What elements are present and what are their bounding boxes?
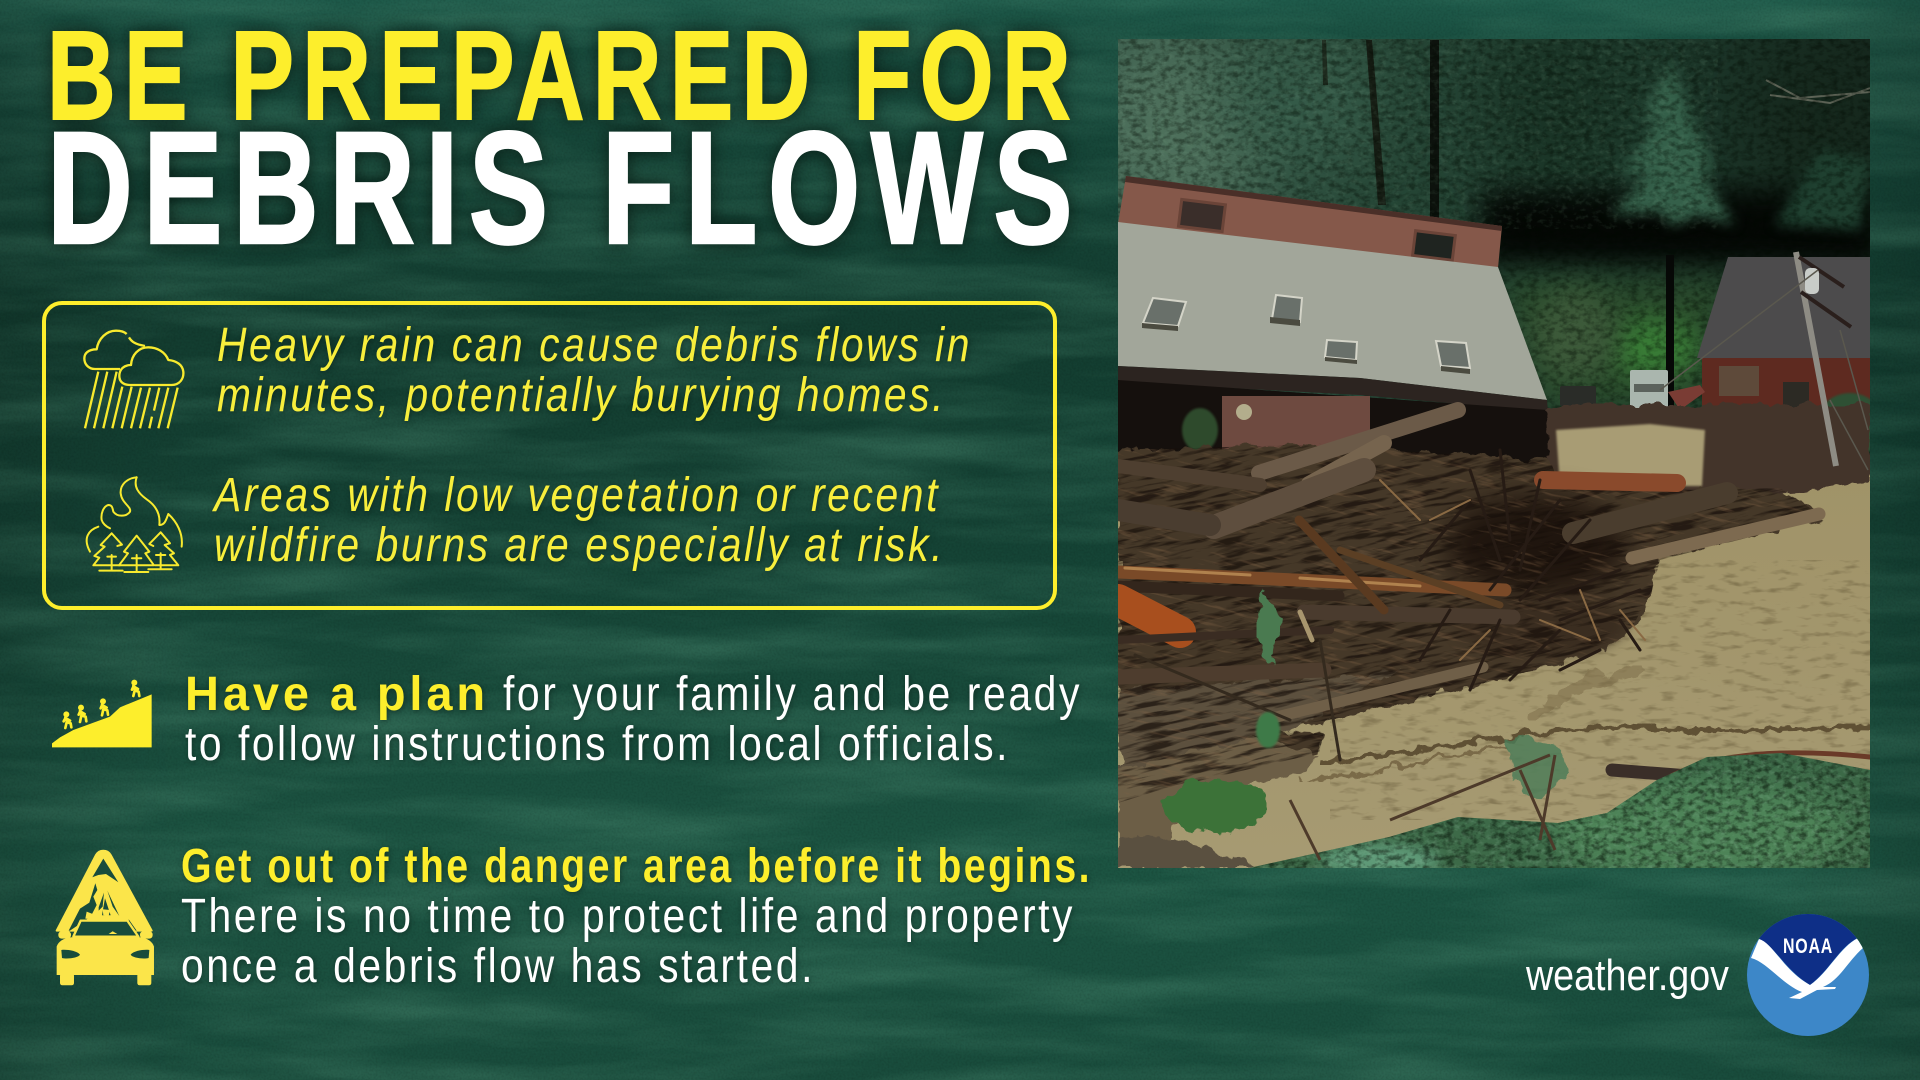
danger text: line three: once a debris flow has started. — [181, 940, 815, 993]
danger text: bold lead: Get out of the danger area before it begins. — [181, 840, 1092, 893]
black utility pole — [1666, 255, 1674, 410]
logo lettering: NOAA — [1783, 935, 1833, 958]
second house — [1697, 257, 1884, 457]
main house: eave and lower wall — [1118, 366, 1550, 464]
twig texture over debris — [1118, 445, 1810, 802]
mud ground — [1118, 405, 1870, 868]
main house: upper brown wall — [1118, 176, 1502, 268]
green vegetation foreground — [1118, 590, 1880, 880]
website label: weather.gov: weather.gov — [1525, 951, 1729, 1000]
main house: grey roof — [1118, 222, 1547, 400]
text line: wildfire burns are especially at risk. — [214, 519, 945, 572]
leaning utility pole — [1660, 252, 1868, 470]
root mass and branches — [1380, 450, 1645, 690]
debris field — [1118, 445, 1825, 845]
text line: Areas with low vegetation or recent — [211, 469, 940, 522]
plan text — [185, 668, 1082, 771]
logo: NOAA — [1747, 914, 1869, 1036]
panel: risk callout box — [44, 303, 1055, 608]
forest masses — [1090, 20, 1880, 265]
mud ridges — [1300, 668, 1870, 780]
icon: car with debris flow warning triangle — [57, 851, 154, 985]
danger area text — [181, 840, 1092, 993]
icon: rain clouds — [84, 331, 183, 428]
icon: wildfire and trees — [87, 477, 182, 572]
tree trunks and logs — [1118, 410, 1870, 792]
plan text: remainder of line: for your family and be ready — [503, 668, 1082, 721]
callout text: wildfire burns — [211, 469, 945, 572]
hillside vegetation — [1500, 280, 1735, 410]
text line: Heavy rain can cause debris flows in — [217, 319, 972, 372]
title — [47, 5, 1083, 277]
plan text: bold lead: Have a plan — [185, 668, 489, 721]
callout text: heavy rain — [217, 319, 972, 422]
title line: be prepared for: BE PREPARED FOR — [47, 5, 1079, 146]
plan text: second line: to follow instructions from local officials. — [185, 718, 1010, 771]
foliage texture — [1118, 39, 1870, 409]
icon: people climbing hill — [52, 681, 152, 747]
white trailer — [1560, 370, 1705, 410]
title line: debris flows: DEBRIS FLOWS — [47, 98, 1083, 277]
danger text: line two: There is no time to protect life and property — [181, 890, 1075, 943]
photo: houses buried by debris flow — [1118, 39, 1870, 868]
text line: minutes, potentially burying homes. — [217, 369, 946, 422]
